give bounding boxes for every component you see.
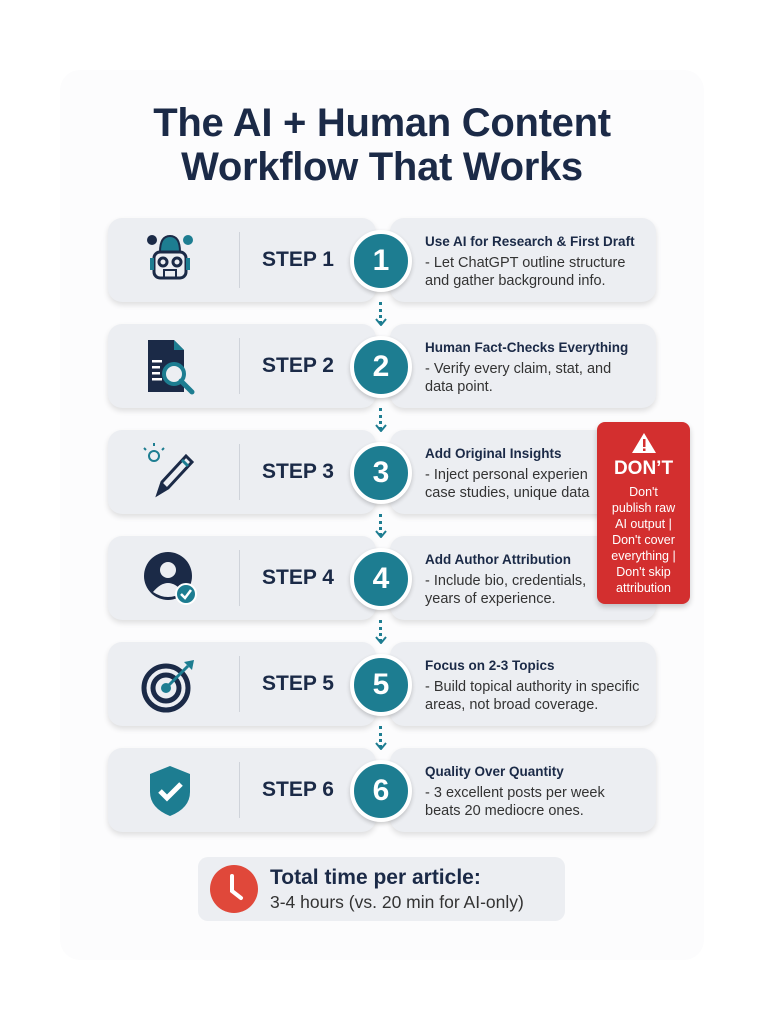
step 1 row (106, 218, 658, 306)
summary box: total time (198, 857, 565, 921)
number badge 2 (350, 336, 412, 398)
number badge 1: 1 (373, 244, 389, 277)
number badge 2: 2 (373, 350, 389, 383)
number badge 4 (350, 548, 412, 610)
connector 4-5 (379, 620, 383, 642)
step 4 row: STEP 4 (262, 566, 334, 589)
callout: don't: Don't (629, 485, 658, 499)
icon: clock (210, 865, 258, 913)
number badge 6 (350, 760, 412, 822)
number badge 1 (350, 230, 412, 292)
step 6 row: - 3 excellent posts per week (425, 785, 605, 801)
step 4 row: - Include bio, credentials, (425, 573, 586, 589)
title: Workflow That Works (181, 145, 583, 189)
callout: don't: publish raw (612, 501, 675, 515)
step 5 row: Focus on 2-3 Topics (425, 658, 555, 673)
summary box: total time: 3-4 hours (vs. 20 min for AI-only) (270, 892, 524, 912)
title: The AI + Human Content (153, 101, 611, 145)
arrow 5-6 (375, 742, 387, 750)
arrow 2-3 (375, 424, 387, 432)
callout: don't: Don't skip (616, 565, 671, 579)
number badge 4: 4 (373, 562, 389, 595)
step 6 row: beats 20 mediocre ones. (425, 803, 584, 819)
callout: don't: attribution (616, 581, 671, 595)
callout: don't: DON’T (614, 458, 673, 479)
icon: pencil and bulb (143, 443, 194, 498)
number badge 6: 6 (373, 774, 389, 807)
icon: shield check (150, 766, 190, 816)
step 4 row: Add Author Attribution (425, 552, 571, 567)
number badge 3 (350, 442, 412, 504)
step 2 row: STEP 2 (262, 354, 334, 377)
icon: target (142, 660, 194, 712)
step 4 row (106, 536, 658, 624)
connector 5-6 (379, 726, 383, 748)
step 3 row (106, 430, 597, 518)
summary box: total time: Total time per article: (270, 866, 481, 889)
step 6 row: Quality Over Quantity (425, 764, 564, 779)
step 5 row: areas, not broad coverage. (425, 697, 598, 713)
callout: don't: AI output | (615, 517, 672, 531)
step 5 row: STEP 5 (262, 672, 334, 695)
step 3 row: case studies, unique data (425, 485, 589, 501)
step 1 row: Use AI for Research & First Draft (425, 234, 635, 249)
step 2 row: data point. (425, 379, 493, 395)
step 3 row: Add Original Insights (425, 446, 562, 461)
number badge 5: 5 (373, 668, 389, 701)
number badge 3: 3 (373, 456, 389, 489)
step 4 row: years of experience. (425, 591, 556, 607)
step 1 row: - Let ChatGPT outline structure (425, 255, 625, 271)
callout: don't: Don't cover (612, 533, 675, 547)
connector 3-4 (379, 514, 383, 536)
callout: don't (597, 422, 690, 604)
arrow 4-5 (375, 636, 387, 644)
connector 1-2 (379, 302, 383, 324)
icon: user check (144, 552, 197, 605)
step 6 row: STEP 6 (262, 778, 334, 801)
step 6 row (106, 748, 658, 836)
icon: warning (632, 433, 656, 453)
step 2 row: Human Fact-Checks Everything (425, 340, 628, 355)
step 1 row: STEP 1 (262, 248, 334, 271)
title (153, 101, 611, 189)
step 2 row: - Verify every claim, stat, and (425, 361, 611, 377)
step 3 row: STEP 3 (262, 460, 334, 483)
arrow 3-4 (375, 530, 387, 538)
connector 2-3 (379, 408, 383, 430)
step 2 row (106, 324, 658, 412)
step 3 row: - Inject personal experien (425, 467, 588, 483)
callout: don't: everything | (611, 549, 676, 563)
number badge 5 (350, 654, 412, 716)
step 5 row (106, 642, 658, 730)
step 1 row: and gather background info. (425, 273, 606, 289)
icon: document magnifier (148, 340, 194, 394)
step 5 row: - Build topical authority in specific (425, 679, 639, 695)
icon: robot brain (147, 235, 193, 280)
arrow 1-2 (375, 318, 387, 326)
